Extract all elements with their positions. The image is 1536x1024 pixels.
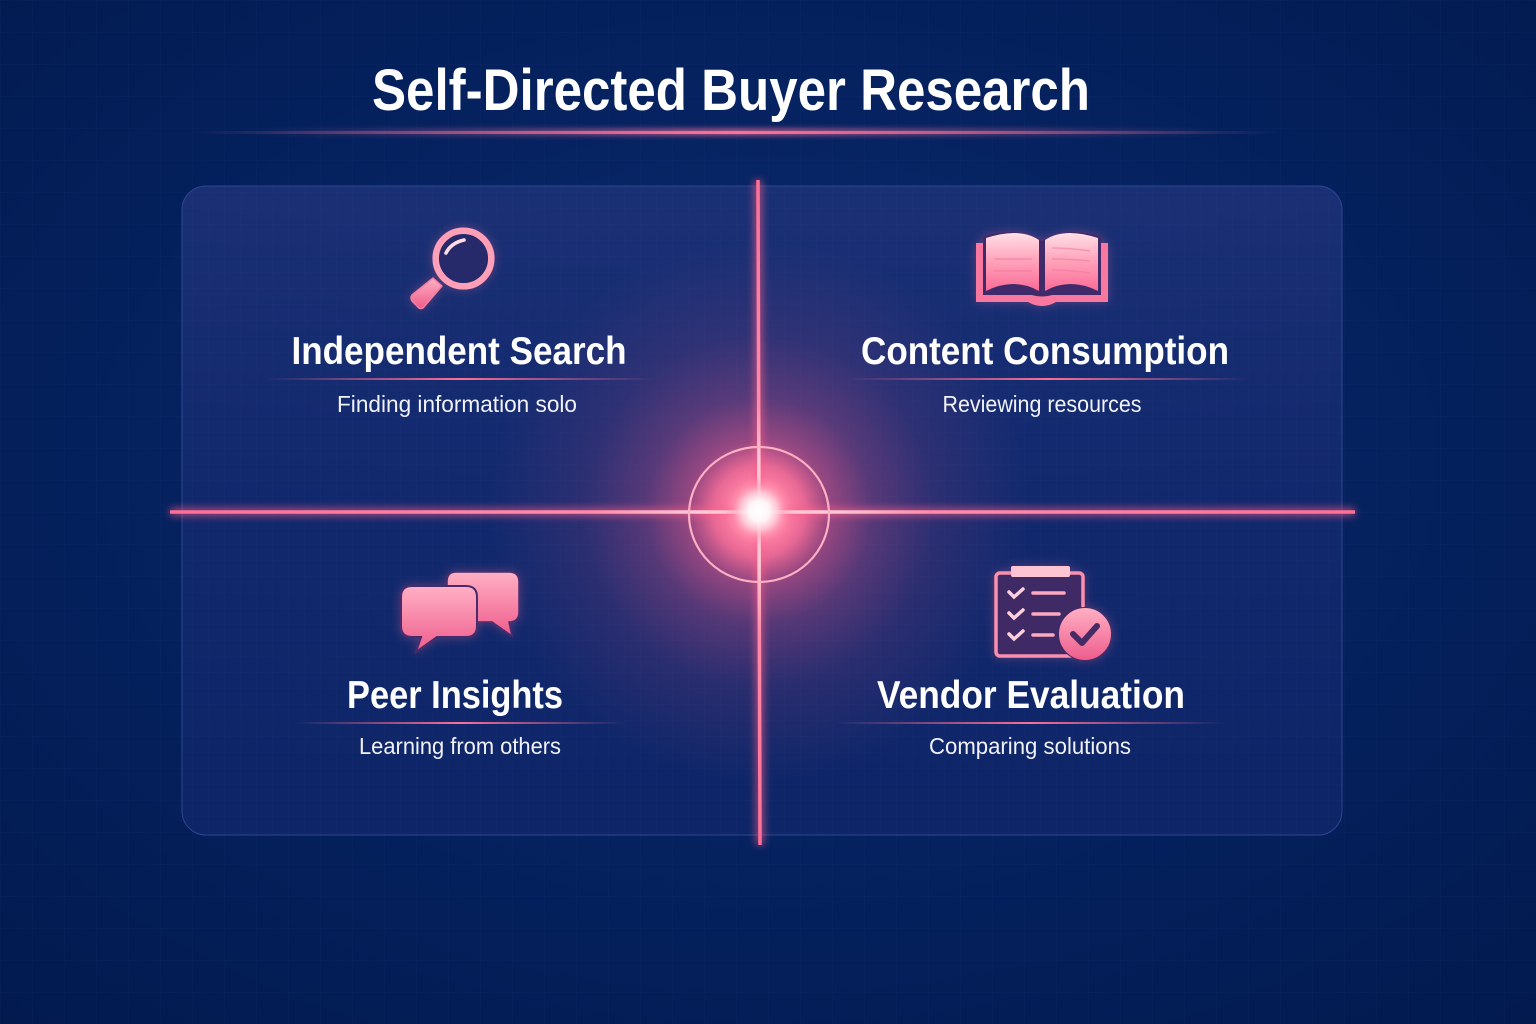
title underline bbox=[190, 129, 1280, 135]
heading: Peer Insights bbox=[347, 674, 563, 717]
panel: Peer Insights bbox=[295, 572, 625, 759]
icon: magnifying glass bbox=[411, 231, 491, 308]
description: Learning from others bbox=[359, 733, 561, 759]
panel: Independent Search bbox=[265, 231, 655, 417]
center ring bbox=[689, 447, 829, 582]
center core bbox=[725, 477, 793, 545]
crosshair lines bbox=[170, 180, 1355, 845]
divider bbox=[295, 722, 625, 724]
heading: Content Consumption bbox=[861, 330, 1229, 373]
panel: Content Consumption bbox=[845, 232, 1250, 417]
divider bbox=[845, 378, 1250, 380]
center glow bbox=[489, 241, 1029, 781]
title: Self-Directed Buyer Research bbox=[372, 58, 1090, 123]
panel: Vendor Evaluation bbox=[835, 566, 1225, 759]
icon: open book bbox=[976, 232, 1108, 306]
description: Reviewing resources bbox=[942, 391, 1142, 417]
heading: Vendor Evaluation bbox=[877, 674, 1185, 717]
icon: speech bubbles bbox=[401, 572, 519, 652]
heading: Independent Search bbox=[292, 330, 626, 373]
icon: checklist with check badge bbox=[996, 566, 1112, 660]
divider bbox=[835, 722, 1225, 724]
description: Comparing solutions bbox=[929, 733, 1131, 759]
description: Finding information solo bbox=[337, 391, 577, 417]
divider bbox=[265, 378, 655, 380]
panel: quadrant card bbox=[182, 186, 1342, 835]
